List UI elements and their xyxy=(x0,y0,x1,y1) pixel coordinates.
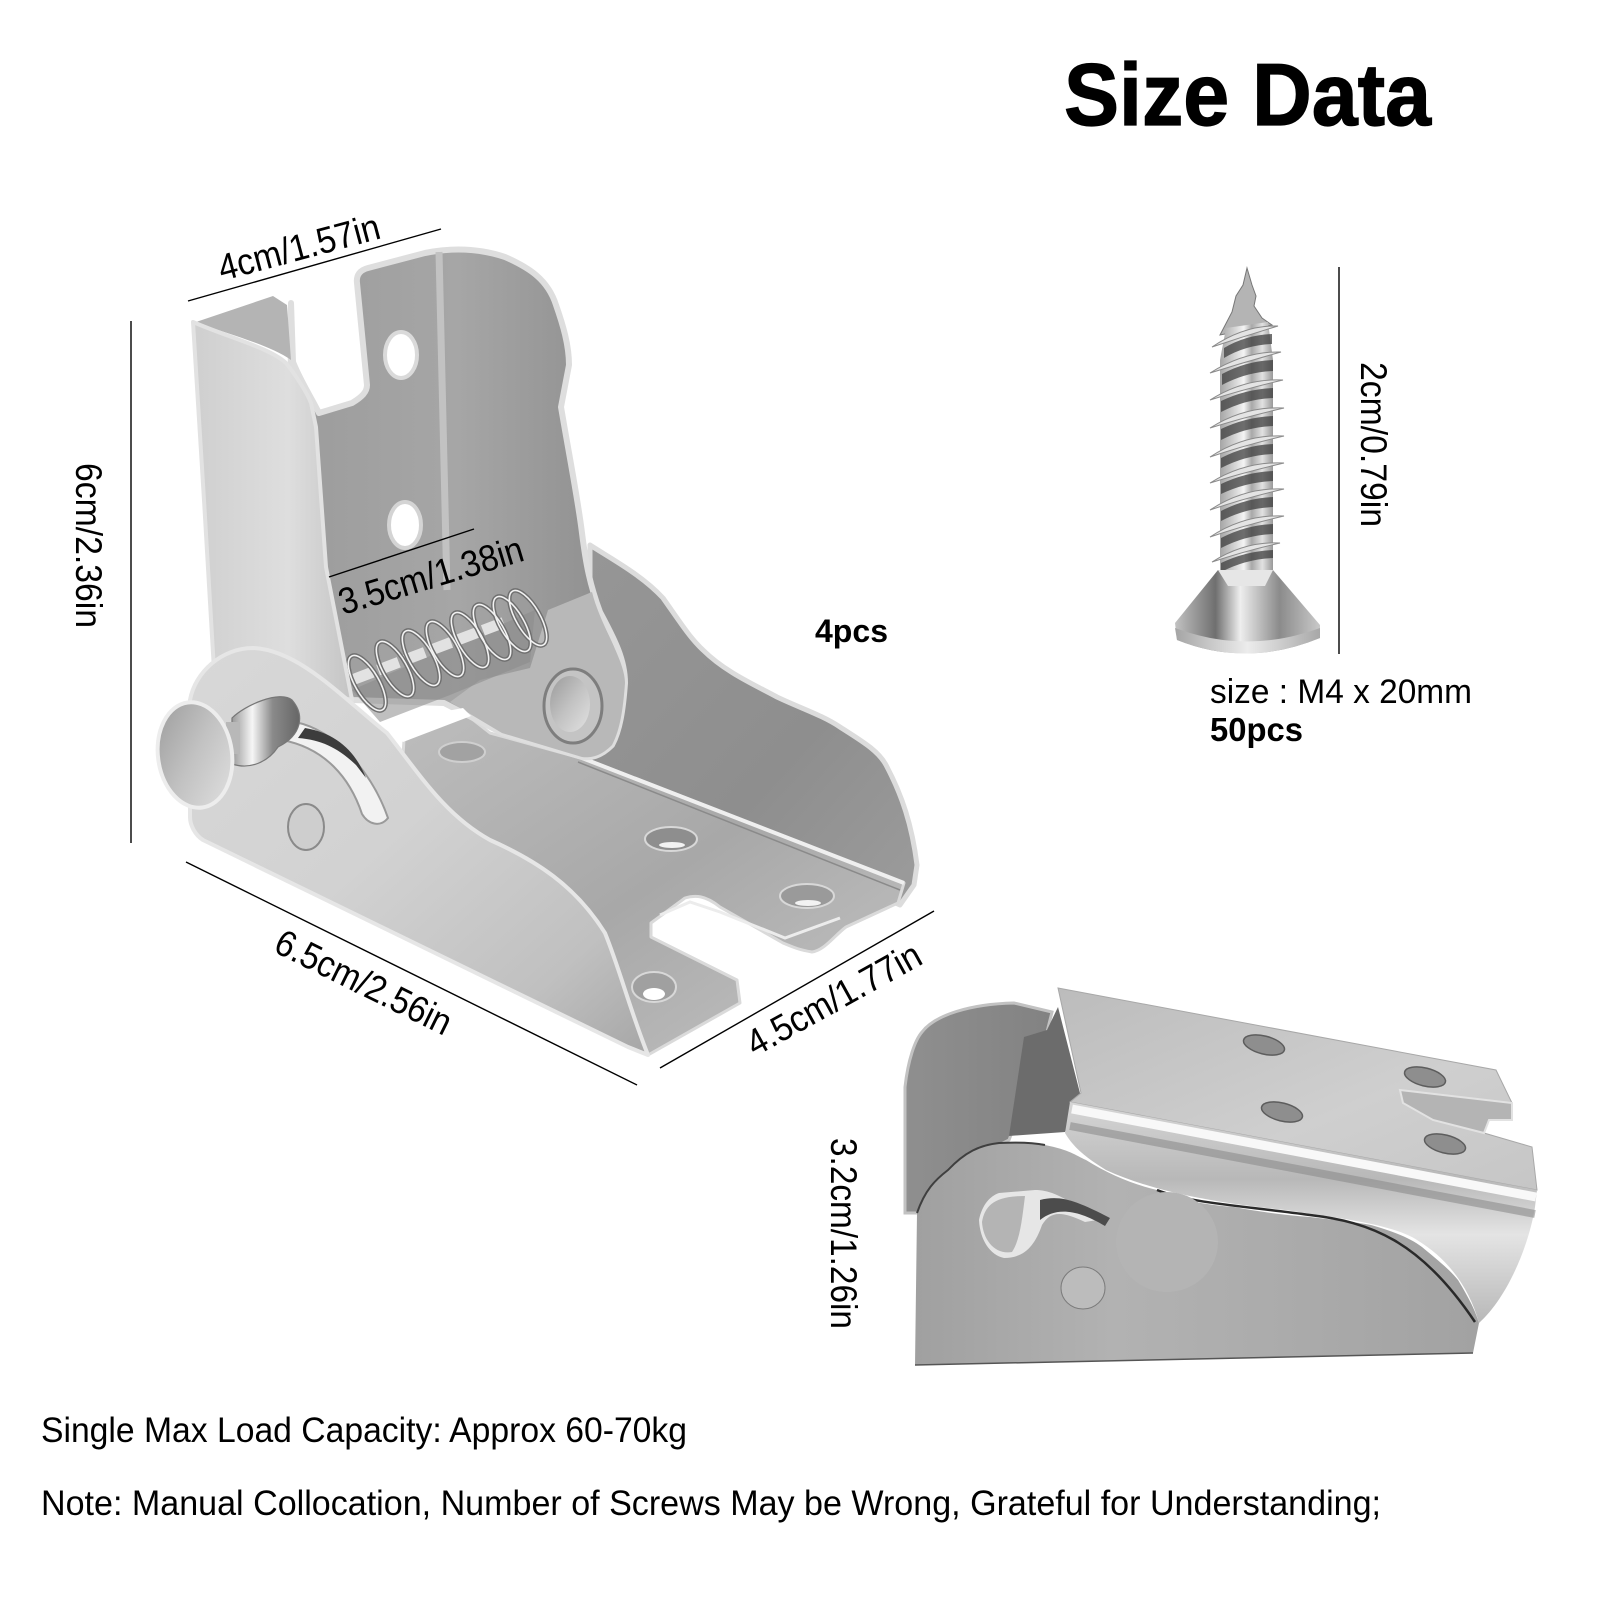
dimension: top width xyxy=(188,206,441,301)
cam slot xyxy=(282,722,388,824)
dimension: top width: 4cm/1.57in xyxy=(213,206,384,289)
push button xyxy=(1116,1192,1218,1292)
load capacity note: Single Max Load Capacity: Approx 60-70kg xyxy=(41,1411,687,1450)
front plate slot xyxy=(979,1190,1110,1258)
dimension: screw length: 2cm/0.79in xyxy=(1353,362,1394,527)
lock nut xyxy=(226,697,300,766)
inner shadow wedge xyxy=(1009,1007,1081,1136)
spring shadow xyxy=(352,610,535,722)
front side plate xyxy=(915,1143,1479,1365)
rear arched plate xyxy=(905,1003,1052,1213)
title: Size Data xyxy=(1064,45,1432,144)
bracket quantity: 4pcs xyxy=(815,613,888,649)
screw threads xyxy=(1210,326,1284,562)
floor mounting holes xyxy=(439,742,834,1002)
screw size label: size : M4 x 20mm xyxy=(1210,673,1472,711)
dimension: inner width: 3.5cm/1.38in xyxy=(334,529,528,623)
product photo: screw xyxy=(1175,268,1320,654)
screw quantity: 50pcs xyxy=(1210,711,1303,748)
spring rod xyxy=(352,622,505,680)
slot in top plate xyxy=(1400,1090,1512,1133)
base floor xyxy=(400,715,904,1055)
dimension: folded height: 3.2cm/1.26in xyxy=(823,1138,864,1329)
spring coils xyxy=(341,585,554,716)
product photo: folded bracket xyxy=(905,988,1537,1365)
white gap under spring xyxy=(383,708,471,742)
outer side plate xyxy=(190,648,648,1055)
screw count note: Note: Manual Collocation, Number of Screws May be Wrong, Grateful for Understanding; xyxy=(41,1484,1381,1523)
top plate holes xyxy=(1241,1031,1468,1158)
dark thread shadows xyxy=(1221,334,1273,572)
flange inner tip xyxy=(196,296,291,360)
dimension: length: 6.5cm/2.56in xyxy=(268,921,459,1043)
screw tip xyxy=(1220,268,1272,335)
left flange with front curve xyxy=(193,322,352,700)
dimension: height: 6cm/2.36in xyxy=(68,463,109,628)
screw shaft xyxy=(1220,322,1273,575)
pivot plate lower end xyxy=(450,592,625,757)
dimension: base width xyxy=(660,911,934,1068)
top plate xyxy=(1058,988,1537,1190)
push button xyxy=(151,697,239,813)
dimension: length xyxy=(186,862,637,1085)
pivot rivet xyxy=(544,669,602,743)
right wall of base xyxy=(590,545,917,905)
countersunk head xyxy=(1175,570,1320,654)
curved lip xyxy=(1065,1102,1537,1323)
rivet xyxy=(1061,1267,1105,1309)
product photo: unfolded bracket xyxy=(151,250,917,1055)
upright back plate with slot xyxy=(290,250,625,757)
dimension: base width: 4.5cm/1.77in xyxy=(739,934,929,1064)
rivet xyxy=(288,804,324,850)
upright screw holes xyxy=(385,332,421,548)
